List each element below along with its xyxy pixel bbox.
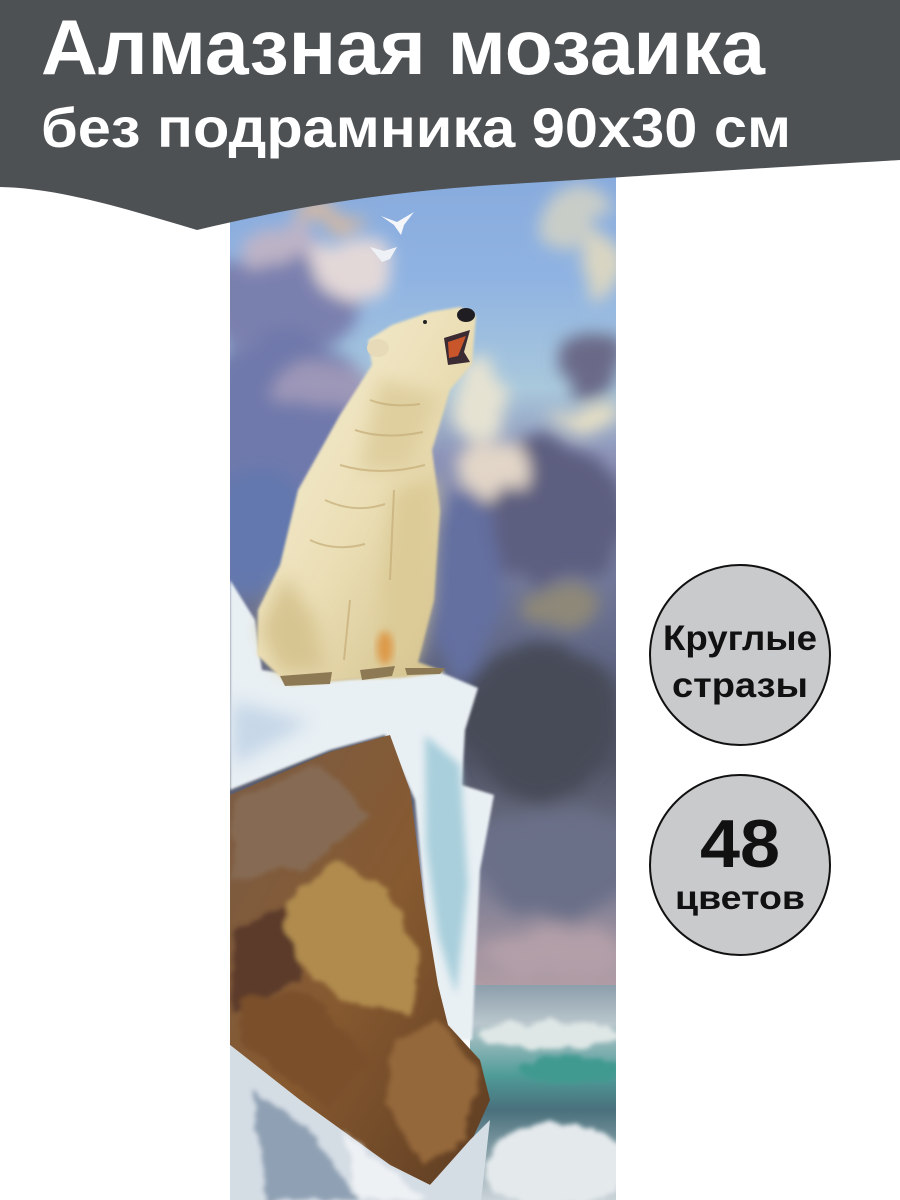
badge: round rhinestones: стразы [672,666,808,705]
badge: round rhinestones [650,565,830,745]
clouds [230,179,616,973]
painting: polar bear on a cliff [230,177,616,1200]
bear shading [260,380,440,672]
eye [423,320,427,324]
ear [367,339,389,357]
paws [280,666,445,686]
title: без подрамника 90х30 см [41,96,791,159]
header banner [0,0,900,230]
title [41,3,791,159]
sea [470,985,625,1200]
rock cliff [230,735,490,1185]
title: Алмазная мозаика [41,3,766,91]
birds [370,212,414,262]
sky [230,150,616,1000]
nose [457,308,475,322]
surf at rock base [230,1045,490,1200]
polar bear [257,307,476,686]
badge: 48 colours [650,775,830,955]
ice waterfall and snow [230,580,494,1040]
fur strokes [310,400,425,660]
mouth [444,330,470,365]
badge: round rhinestones: Круглые [663,619,817,658]
badge: 48 colours: 48 [700,806,780,882]
badge: 48 colours: цветов [675,879,805,916]
